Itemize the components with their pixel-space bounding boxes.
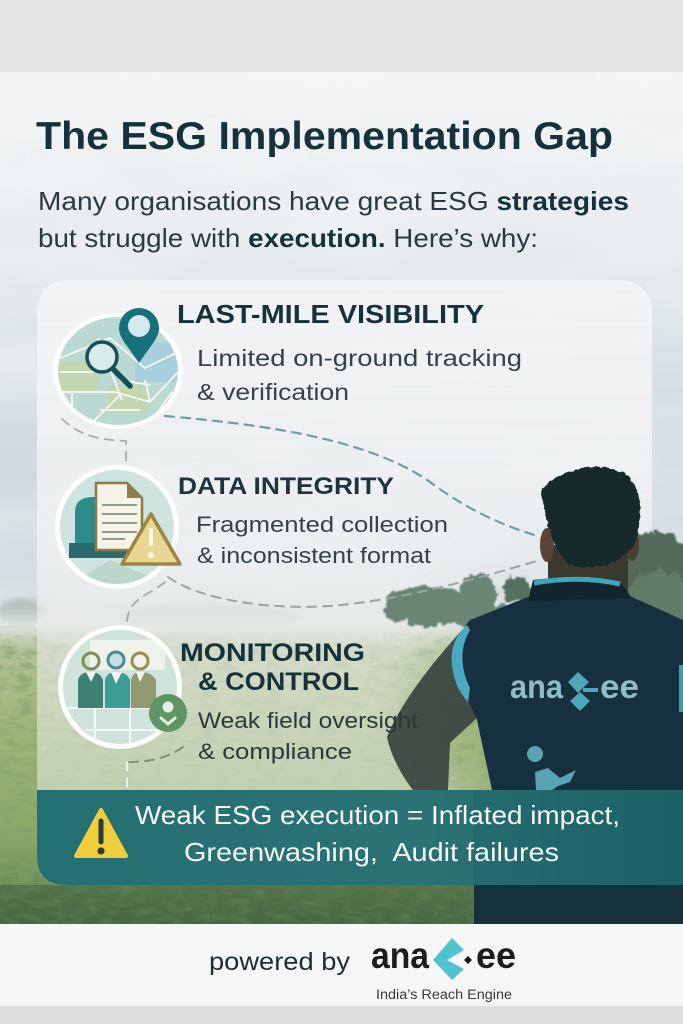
heading: monitoring and control xyxy=(180,639,365,696)
callout text: Weak ESG execution = Inflated impact, xyxy=(135,800,620,830)
green badge xyxy=(149,694,187,732)
neck xyxy=(548,545,628,592)
warning triangle xyxy=(122,514,180,564)
document xyxy=(96,483,142,550)
panel: translucent card xyxy=(37,280,652,885)
heading: last-mile visibility: LAST-MILE VISIBILITY xyxy=(177,299,484,329)
clouds xyxy=(0,72,683,632)
text: last-mile description: & verification xyxy=(197,379,349,405)
footer logo xyxy=(371,935,516,980)
text: monitoring description xyxy=(198,708,418,764)
person from behind in jacket xyxy=(387,467,683,924)
intro text: but struggle with execution. Here’s why: xyxy=(38,223,538,253)
jacket emblem xyxy=(527,746,576,790)
text: last-mile description xyxy=(197,345,522,405)
text: data integrity description: & inconsistent format xyxy=(197,543,432,568)
text: data integrity description xyxy=(196,512,448,568)
tree line xyxy=(383,532,683,626)
callout text xyxy=(135,800,620,867)
heading: data integrity: DATA INTEGRITY xyxy=(178,473,394,500)
computer base shape xyxy=(75,497,100,555)
footer logo: ana xyxy=(371,935,429,976)
arm xyxy=(387,630,480,790)
hazy distant trees xyxy=(0,598,300,631)
jacket logo: ana xyxy=(510,668,564,705)
icon: document with warning triangle xyxy=(55,465,180,589)
field xyxy=(0,626,683,924)
jacket logo xyxy=(510,668,639,711)
location pin xyxy=(119,308,159,363)
dashed connectors xyxy=(62,416,540,790)
footer logo: ee xyxy=(476,935,516,976)
icon: yellow warning triangle xyxy=(76,810,126,856)
ears xyxy=(540,528,554,562)
jacket logo: ee xyxy=(600,668,639,705)
icon: team with green badge xyxy=(58,625,187,749)
callout band xyxy=(37,790,683,885)
jacket xyxy=(460,597,683,790)
top margin band xyxy=(0,0,683,72)
people xyxy=(83,652,148,669)
powered by: powered by xyxy=(209,948,351,976)
sleeve stripe xyxy=(452,625,470,702)
icon: map with location pin and magnifier xyxy=(53,308,183,430)
text: monitoring description: & compliance xyxy=(198,739,352,764)
text: monitoring description: Weak field oversight xyxy=(198,708,418,733)
intro text xyxy=(38,186,629,253)
footer strip xyxy=(0,924,683,1024)
collar xyxy=(528,577,632,601)
heading: monitoring and control: MONITORING xyxy=(180,639,365,667)
text: data integrity description: Fragmented collection xyxy=(196,512,448,537)
text: last-mile description: Limited on-ground tracking xyxy=(197,345,522,371)
tagline: India’s Reach Engine xyxy=(376,987,512,1002)
title: The ESG Implementation Gap xyxy=(36,115,613,158)
callout text: Greenwashing, Audit failures xyxy=(184,837,559,867)
intro text: Many organisations have great ESG strategies xyxy=(38,186,629,216)
head hair xyxy=(541,467,640,568)
heading: monitoring and control: & CONTROL xyxy=(198,668,359,696)
magnifier xyxy=(87,342,130,386)
